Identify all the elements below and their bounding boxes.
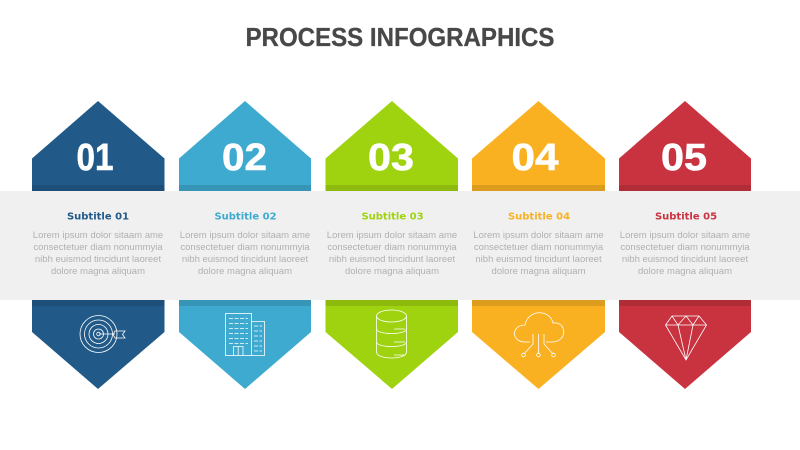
- bottom arrow 01: [32, 300, 164, 389]
- text block 03: nibh euismod tincidunt laoreet: [329, 254, 455, 265]
- text block 02: nibh euismod tincidunt laoreet: [182, 254, 308, 265]
- bottom arrow 03: [326, 300, 458, 389]
- text block 05: nibh euismod tincidunt laoreet: [622, 254, 748, 265]
- icon: cloud network: [514, 313, 564, 357]
- text block 04: dolore magna aliquam: [491, 266, 586, 277]
- text block 04: consectetuer diam nonummyia: [474, 242, 604, 253]
- text block 02: dolore magna aliquam: [198, 266, 292, 277]
- text block 01: nibh euismod tincidunt laoreet: [35, 254, 161, 265]
- text block 05: consectetuer diam nonummyia: [620, 242, 750, 253]
- text block 04: [473, 212, 604, 277]
- text block 04: Subtitle 04: [508, 212, 570, 222]
- text block 01: [33, 212, 163, 277]
- text block 01: consectetuer diam nonummyia: [33, 242, 163, 253]
- icon: target: [80, 316, 125, 352]
- text block 04: nibh euismod tincidunt laoreet: [475, 254, 602, 265]
- top arrow 01: [32, 101, 164, 191]
- text block 02: [180, 212, 310, 277]
- text block 01: Lorem ipsum dolor sitaam ame: [33, 230, 163, 241]
- icon: buildings: [226, 314, 264, 356]
- title: PROCESS INFOGRAPHICS: [246, 22, 554, 52]
- top arrow 05: [619, 101, 751, 191]
- top arrow 02: [179, 101, 311, 191]
- text block 02: consectetuer diam nonummyia: [180, 242, 310, 253]
- text block 05: Subtitle 05: [655, 212, 717, 222]
- top arrow 04: [472, 101, 605, 191]
- top arrow 04: 04: [512, 137, 558, 179]
- text block 02: Subtitle 02: [214, 212, 277, 222]
- text block 05: [620, 212, 750, 277]
- text block 05: Lorem ipsum dolor sitaam ame: [620, 230, 750, 241]
- top arrow 03: [326, 101, 458, 191]
- text block 03: consectetuer diam nonummyia: [327, 242, 457, 253]
- bottom arrow 04: [472, 300, 605, 389]
- top arrow 05: 05: [661, 137, 707, 179]
- bottom arrow 05: [619, 300, 751, 389]
- bottom arrow 02: [179, 300, 311, 389]
- text block 03: Lorem ipsum dolor sitaam ame: [327, 230, 457, 241]
- text block 03: Subtitle 03: [361, 212, 424, 222]
- text block 05: dolore magna aliquam: [638, 266, 732, 277]
- icon: database: [376, 310, 406, 358]
- text block 02: Lorem ipsum dolor sitaam ame: [180, 230, 310, 241]
- text block 03: [327, 212, 457, 277]
- top arrow 02: 02: [222, 137, 267, 179]
- icon: diamond: [666, 316, 706, 360]
- top arrow 01: 01: [76, 137, 114, 179]
- grey band: [0, 191, 800, 300]
- text block 01: Subtitle 01: [67, 212, 129, 222]
- text block 03: dolore magna aliquam: [345, 266, 439, 277]
- text block 04: Lorem ipsum dolor sitaam ame: [473, 230, 604, 241]
- top arrow 03: 03: [368, 137, 414, 179]
- text block 01: dolore magna aliquam: [51, 266, 145, 277]
